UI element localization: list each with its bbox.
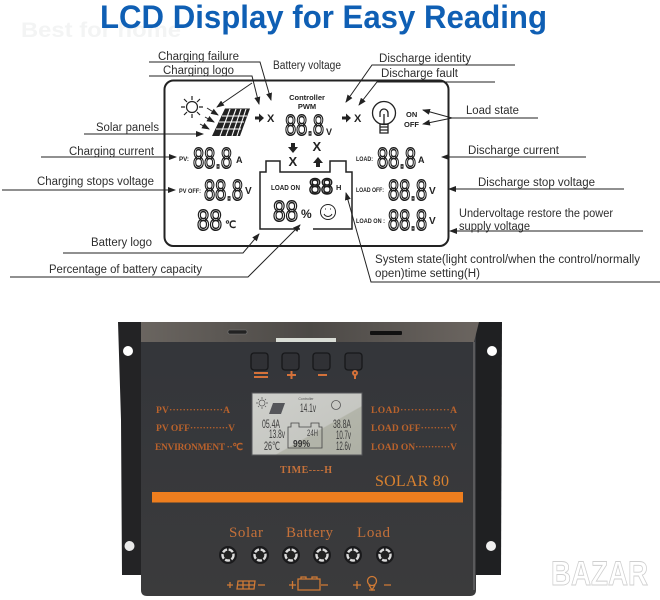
icon: discharge arrow and fault X — [342, 113, 362, 125]
PV OFF voltage readout: PV OFF: — [179, 189, 201, 195]
TIME label: TIME----H — [280, 465, 332, 476]
screen load current: 38.8A — [333, 419, 351, 431]
callout: System state: open)time setting(H) — [375, 268, 480, 280]
callout: Charging failure — [149, 51, 271, 100]
screen time: 24H — [307, 428, 318, 439]
LOAD ON time readout: H — [336, 183, 341, 192]
top slots — [228, 330, 402, 342]
right panel labels — [371, 406, 457, 453]
callout: Load state — [423, 105, 538, 124]
icon: center arrows and X marks: X — [312, 139, 322, 154]
PV current readout: 88.8 — [193, 143, 232, 175]
left mounting bracket — [118, 322, 142, 575]
device LCD screen — [252, 393, 362, 455]
mounting holes — [123, 346, 497, 551]
right panel labels: LOAD OFF·········V — [371, 424, 457, 434]
watermark: Best for home: Best for home — [21, 19, 181, 42]
battery voltage unit: V — [326, 127, 332, 137]
PV OFF voltage readout: 88.8 — [204, 175, 243, 207]
callout: Charging current — [41, 146, 176, 158]
icon: bulb — [372, 102, 396, 133]
title: LCD Display for Easy Reading — [100, 0, 547, 35]
callout: Discharge identity: Discharge identity — [379, 53, 471, 65]
callout: Charging stops voltage: Charging stops voltage — [37, 176, 154, 188]
icon: solar panel — [212, 108, 250, 136]
screen PV current: 05.4A — [262, 419, 280, 431]
callout: Undervoltage restore: supply voltage — [459, 221, 530, 233]
screen load on voltage: 12.6v — [336, 441, 351, 453]
battery percentage readout: % — [301, 207, 312, 221]
LCD outline — [164, 80, 448, 246]
callout: Charging failure: Charging failure — [158, 51, 239, 63]
PV OFF voltage readout — [179, 175, 252, 207]
LOAD ON voltage readout — [356, 205, 436, 237]
icon: solar terminal — [227, 581, 265, 589]
temperature readout: ℃ — [225, 220, 236, 231]
device body — [141, 322, 476, 596]
right mounting bracket — [476, 322, 502, 575]
left panel labels: PV················A — [156, 406, 230, 416]
LOAD ON time readout — [271, 174, 341, 199]
callout: Discharge identity — [346, 53, 515, 102]
PV OFF voltage readout: V — [245, 186, 252, 197]
callout: Discharge fault — [359, 68, 495, 105]
icon: discharge arrow and fault X: X — [354, 113, 362, 125]
buttons — [251, 353, 362, 370]
icon: charging arrow and fault X — [255, 113, 275, 125]
device: solar charge controller — [118, 322, 502, 596]
callout: Load state: Load state — [466, 105, 519, 117]
battery voltage digits: 88.8 — [285, 110, 324, 142]
icon: smiley — [320, 204, 336, 220]
LOAD ON voltage readout: LOAD ON : — [356, 219, 385, 225]
callout: Charging logo: Charging logo — [163, 65, 234, 77]
top bevel — [141, 322, 479, 342]
temperature readout: 88 — [197, 205, 222, 237]
callout: Percentage of battery capacity — [10, 225, 300, 277]
button icons — [254, 371, 357, 379]
left panel labels — [155, 406, 243, 453]
terminal label: Battery: Battery — [286, 525, 334, 541]
PWM label: PWM — [298, 102, 316, 111]
LOAD ON time readout: 88 — [309, 174, 333, 199]
orange bar — [152, 492, 463, 502]
LOAD current readout — [356, 143, 425, 175]
side highlight — [473, 342, 475, 590]
left panel labels: PV OFF············V — [156, 424, 235, 434]
callout: Battery voltage: Battery voltage — [273, 60, 341, 72]
callout: Charging current: Charging current — [69, 146, 155, 158]
callout: Undervoltage restore: Undervoltage restore the power — [459, 208, 613, 220]
icon: battery outline — [260, 161, 352, 229]
screen load off voltage: 10.7v — [336, 430, 351, 442]
icon: battery terminal — [289, 577, 328, 590]
PV current readout: A — [236, 155, 243, 165]
callout: Discharge fault: Discharge fault — [381, 68, 459, 80]
screen PV OFF voltage: 13.8v — [269, 429, 285, 441]
icon: center arrows and X marks: X — [288, 154, 298, 169]
right panel labels: LOAD ON···········V — [371, 443, 457, 453]
PV current readout: PV: — [179, 157, 189, 163]
callout: Discharge stop voltage: Discharge stop voltage — [478, 177, 595, 189]
icon: charging rays — [200, 108, 218, 129]
screen bulb — [332, 400, 340, 410]
callout: System state — [346, 193, 660, 282]
callout: Undervoltage restore — [450, 208, 643, 233]
LOAD OFF voltage readout: 88.8 — [388, 175, 427, 207]
load state ON: ON — [406, 110, 417, 119]
LOAD ON time readout: LOAD ON — [271, 183, 300, 192]
screen solar panel — [269, 403, 285, 414]
callout: Charging logo — [149, 65, 259, 107]
LOAD current readout: 88.8 — [377, 143, 416, 175]
load state OFF: OFF — [404, 120, 419, 129]
left panel labels: ENVIRONMENT ··℃ — [155, 442, 243, 453]
icon: load terminal — [353, 576, 391, 590]
LOAD ON voltage readout: V — [429, 216, 436, 227]
screen temperature: 26℃ — [264, 441, 280, 453]
LOAD OFF voltage readout: V — [429, 186, 436, 197]
callout: Percentage of battery capacity: Percentage of battery capacity — [49, 264, 202, 276]
terminal label: Load: Load — [357, 525, 390, 541]
LOAD current readout: LOAD: — [356, 157, 373, 163]
icon: sun — [181, 96, 203, 118]
screen battery — [288, 423, 322, 448]
callout: System state: System state(light control/when the control/normally — [375, 254, 640, 266]
LOAD OFF voltage readout — [356, 175, 436, 207]
terminal label: Solar: Solar — [229, 525, 263, 541]
callout: Solar panels — [84, 122, 203, 134]
screen sun icon — [256, 397, 268, 409]
panel: LCD diagram — [164, 80, 448, 246]
screen controller label: Controller — [298, 397, 314, 401]
LOAD current readout: A — [418, 155, 425, 165]
icon: center arrows and X marks — [288, 139, 323, 169]
callout: Solar panels: Solar panels — [96, 122, 159, 134]
terminal screws — [219, 546, 394, 564]
screen percent: 99% — [293, 439, 310, 450]
battery percentage readout: 88 — [273, 196, 298, 228]
callout: Battery logo — [63, 234, 259, 253]
screen battery voltage: 14.1v — [300, 403, 316, 415]
controller PWM label: Controller — [289, 93, 325, 102]
icon: charging arrow and fault X: X — [267, 113, 275, 125]
callout: Battery logo: Battery logo — [91, 237, 152, 249]
model name: SOLAR 80 — [375, 473, 449, 490]
LOAD OFF voltage readout: LOAD OFF: — [356, 188, 384, 194]
callout: Discharge current: Discharge current — [468, 145, 560, 157]
LOAD ON voltage readout: 88.8 — [388, 205, 427, 237]
right panel labels: LOAD··············A — [371, 406, 457, 416]
